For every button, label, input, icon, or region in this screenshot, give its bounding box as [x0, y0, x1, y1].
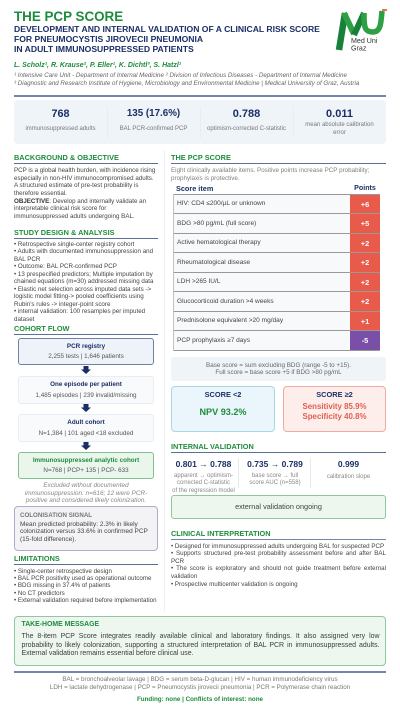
text block: especially in non-HIV immunocompromised adults.: [14, 175, 154, 182]
row: Rheumatological disease: [177, 258, 250, 266]
row: HIV: CD4 ≤200/µL or unknown: [177, 200, 265, 207]
stat: calibration error: mean absolute calibration: [305, 122, 374, 128]
text block: • 13 prespecified predictors; Multiple imputation by: [14, 271, 153, 278]
stat: BAL PCR-confirmed PCP: BAL PCR-confirmed PCP: [120, 126, 187, 132]
heading: STUDY DESIGN & ANALYSIS: [14, 228, 115, 237]
metric: calibration slope: [327, 459, 370, 480]
metric: C-statistic: [172, 459, 235, 494]
callout text: (15-fold difference).: [20, 536, 76, 543]
flow box: PCR registry: PCR registry: [67, 343, 105, 350]
text block: External validation remains essential before clinical use.: [22, 650, 193, 657]
table header: Score item: [176, 184, 213, 192]
row: [174, 292, 380, 312]
text block: • The score is exploratory and should not guide treatment before external: [171, 565, 386, 572]
callout: external validation ongoing: [171, 495, 386, 518]
subtitle: [14, 24, 320, 54]
callout text: colonization versus 33.6% in confirmed PCP: [20, 528, 148, 535]
row: +2: [361, 297, 369, 306]
flow box: PCR registry: 2,255 tests | 1,646 patients: [48, 353, 124, 360]
row: Active hematological therapy: [177, 239, 261, 246]
text block: OBJECTIVE: Develop and internally validate an: [14, 198, 146, 205]
footer: abbreviations: BAL = bronchoalveolar lavage | BDG = serum beta-D-glucan | HIV = human immunodeficiency virus: [62, 676, 338, 683]
text block: • Supports structured pre-test probability assessment before and after BAL: [171, 550, 386, 557]
text block: [14, 241, 154, 323]
icon: Med Uni Graz logo: [336, 9, 387, 52]
icon: Med Uni Graz logo: Graz: [351, 44, 367, 52]
heading: INTERNAL VALIDATION: [171, 442, 254, 450]
row: Glucocorticoid duration >4 weeks: [177, 298, 274, 304]
row: [174, 234, 380, 253]
callout text: [20, 520, 148, 543]
panel: clinical interpretation: [171, 528, 386, 588]
callout: colonisation signal: [14, 506, 158, 551]
panel: score 2 or above: [283, 386, 386, 432]
sensitivity and specificity: [302, 402, 367, 421]
text block: • BDG missing in 37.4% of patients: [14, 582, 111, 589]
text block: PCR: [171, 558, 184, 565]
stat: immunosuppressed adults: [25, 108, 96, 132]
label: SCORE ≥2: [316, 390, 353, 399]
row: [174, 331, 380, 351]
flow box: analytic cohort: Immunosuppressed analytic cohort: [33, 457, 139, 464]
stat: immunosuppressed adults: immunosuppressed adults: [25, 126, 96, 132]
footer: abbreviations: LDH = lactate dehydrogenase | PCP = Pneumocystis jirovecii pneumonia | PCR = Polymerase chain reaction: [50, 684, 350, 691]
panel: background and objective: [14, 153, 158, 220]
panel: the PCP score: [171, 153, 386, 351]
text block: • Single-center retrospective design: [14, 568, 112, 574]
title: THE PCP SCORE: [14, 9, 123, 24]
callout: external validation ongoing: external validation ongoing: [235, 502, 322, 511]
text block: chained equations (m=30) addressed missing data: [14, 278, 154, 285]
text block: [171, 543, 386, 588]
metric: calibration slope: 0.999: [338, 459, 359, 469]
exclusion note: [25, 482, 147, 504]
affiliations: ³ Diagnostic and Research Institute of Hygiene, Microbiology and Environmental Medicine | Medical University of Graz, Austria: [14, 80, 359, 87]
row: BDG >80 pg/mL (full score): [177, 220, 256, 226]
text block: • External validation required before implementation: [14, 597, 157, 604]
row: +5: [361, 219, 369, 228]
text block: Rubin's rules -> integer-point score: [14, 301, 110, 308]
text block: immunosuppressed adults undergoing BAL.: [14, 213, 135, 220]
arrow: [81, 404, 91, 412]
footer: funding: Funding: none | Conflicts of interest: none: [137, 696, 263, 703]
heading: COHORT FLOW: [14, 324, 69, 333]
text block: logistic model fitting-> pooled coefficients using: [14, 293, 144, 300]
heading: LIMITATIONS: [14, 554, 60, 563]
row: +1: [361, 316, 369, 326]
flow box: adult cohort: [18, 414, 154, 442]
row: [174, 272, 380, 292]
stat: calibration error: error: [333, 130, 346, 136]
metric: C-statistic: corrected C-statistic: [177, 480, 230, 486]
text block: • Prospective multicenter validation is ongoing: [171, 581, 298, 588]
metric: C-statistic: of the regression model: [172, 488, 235, 494]
flow box: adult cohort: Adult cohort: [67, 419, 105, 426]
row: -5: [362, 336, 368, 345]
text block: validation: [171, 573, 197, 580]
text block: • Elastic net selection across imputed data sets ->: [14, 286, 151, 293]
authors: L. Scholz¹, R. Krause², P. Eller¹, K. Dichtl³, S. Hatzl¹: [14, 62, 181, 69]
affiliations: [14, 72, 360, 87]
description: [171, 167, 369, 182]
metric: C-statistic: 0.801 → 0.788: [176, 459, 231, 469]
exclusion note: immunosuppression: n=616; 12 were PCR-: [25, 490, 147, 497]
exclusion note: positive and considered likely colonization.: [26, 497, 146, 504]
row: LDH >265 IU/L: [177, 278, 220, 285]
flow box: adult cohort: N=1,384 | 101 aged <18 excluded: [39, 430, 133, 436]
metric: calibration slope: calibration slope: [327, 474, 370, 480]
row: Prednisolone equivalent >20 mg/day: [177, 317, 283, 324]
panel: internal validation: [171, 442, 386, 519]
text block: probability to likely colonization, supporting a structured interpretation of BAL PCR in immunosuppressed adults.: [22, 642, 380, 648]
row: [174, 312, 380, 331]
metric: AUC: base score → full: [252, 472, 298, 478]
icon: Med Uni Graz logo: Med Uni: [351, 37, 378, 45]
heading: CLINICAL INTERPRETATION: [171, 528, 271, 538]
panel: cohort flow: [14, 324, 158, 504]
subtitle: DEVELOPMENT AND INTERNAL VALIDATION OF A CLINICAL RISK SCORE: [14, 24, 320, 34]
NPV value: NPV 93.2%: [199, 407, 246, 417]
score table: [174, 194, 380, 350]
panel: score below 2: [171, 386, 275, 432]
text block: [14, 167, 155, 220]
flow box: one episode per patient: 1,485 episodes | 239 invalid/missing: [35, 392, 137, 398]
row: +2: [361, 258, 369, 267]
row: +2: [361, 278, 369, 286]
text block: therefore essential.: [14, 190, 67, 197]
panel: limitations: [14, 554, 158, 604]
text block: • Retrospective single-center registry cohort: [14, 241, 134, 248]
text block: BAL PCR: [14, 256, 40, 263]
stat: immunosuppressed adults: 768: [51, 108, 70, 120]
text block: • Adults with documented immunosuppression and: [14, 248, 153, 255]
sensitivity and specificity: Sensitivity 85.9%: [302, 402, 367, 411]
footer: abbreviations: [50, 676, 350, 691]
panel: the PCP score: Points: [354, 184, 376, 192]
panel: study design and analysis: [14, 228, 158, 323]
text block: • internal validation: 100 resamples per imputed: [14, 308, 145, 315]
arrow: [81, 366, 91, 374]
text block: • BAL PCR positivity used as operational outcome: [14, 575, 151, 582]
text block: interpretable clinical risk score for: [14, 205, 106, 212]
row: [174, 214, 380, 234]
text block: [14, 568, 157, 604]
affiliations: ¹ Intensive Care Unit - Department of Internal Medicine ² Division of Infectious Diseases - Department of Internal Medicine: [14, 72, 347, 79]
flow box: one episode per patient: One episode per patient: [50, 381, 122, 388]
flow box: analytic cohort: N=768 | PCP+ 135 | PCP- 633: [43, 467, 129, 474]
description: Eight clinically available items. Positive points increase PCP probability;: [171, 167, 369, 174]
stat: calibration error: [305, 108, 374, 136]
text block: • No CT predictors: [14, 590, 65, 597]
metric: AUC: 0.735 → 0.789: [247, 459, 303, 469]
text block: • Designed for immunosuppressed adults undergoing BAL for suspected PCP: [171, 543, 384, 550]
stat: BAL PCR-confirmed PCP: 135 (17.6%): [127, 108, 180, 119]
label: SCORE <2: [205, 390, 241, 399]
metric: AUC: score AUC (n=558): [249, 480, 301, 486]
heading: THE PCP SCORE: [171, 153, 231, 162]
text block: • Outcome: BAL PCR-confirmed PCP: [14, 263, 117, 270]
flow box: PCR registry: [18, 338, 154, 365]
row: [174, 253, 380, 273]
flow box: analytic cohort: [18, 452, 154, 479]
text block: A structured estimate of pre-test probability is: [14, 182, 138, 189]
note: score formula: [171, 356, 386, 381]
row: [174, 194, 380, 214]
text block: [22, 632, 380, 657]
arrow: [81, 442, 91, 450]
text block: dataset: [14, 316, 34, 323]
note: score formula: Full score = base score +5 if BDG >80 pg/mL: [215, 369, 342, 376]
heading: TAKE-HOME MESSAGE: [22, 621, 99, 628]
row: +2: [361, 238, 369, 248]
stat: C-statistic: optimism-corrected C-statistic: [207, 126, 286, 132]
metric: AUC: [247, 459, 303, 486]
row: PCP prophylaxis ≥7 days: [177, 336, 250, 344]
exclusion note: Excluded without documented: [43, 482, 129, 489]
note: score formula: Base score = sum excluding BDG (range -5 to +15).: [206, 362, 351, 368]
heading: BACKGROUND & OBJECTIVE: [14, 153, 119, 162]
description: prophylaxis is protective.: [171, 175, 240, 182]
subtitle: IN ADULT IMMUNOSUPPRESSED PATIENTS: [14, 44, 194, 54]
flow box: one episode per patient: [18, 376, 154, 404]
metric: C-statistic: apparent → optimism-: [174, 472, 233, 478]
text block: PCP is a global health burden, with incidence rising: [14, 167, 155, 174]
sensitivity and specificity: Specificity 40.8%: [302, 412, 367, 421]
row: +6: [361, 200, 369, 208]
subtitle: FOR PNEUMOCYSTIS JIROVECII PNEUMONIA: [14, 34, 203, 44]
stat: C-statistic: [207, 108, 286, 132]
callout heading: COLONISATION SIGNAL: [20, 512, 92, 518]
text block: The 8-item PCP Score integrates readily available clinical and laboratory findings. It also assigned very low: [22, 633, 380, 640]
header: [14, 9, 387, 87]
callout text: Mean predicted probability: 2.3% in likely: [20, 520, 138, 528]
stat: calibration error: 0.011: [326, 108, 353, 120]
stat: BAL PCR-confirmed PCP: [120, 108, 187, 132]
panel: key statistics: [14, 100, 386, 144]
stat: C-statistic: 0.788: [233, 108, 260, 120]
panel: take-home message: [14, 616, 386, 666]
